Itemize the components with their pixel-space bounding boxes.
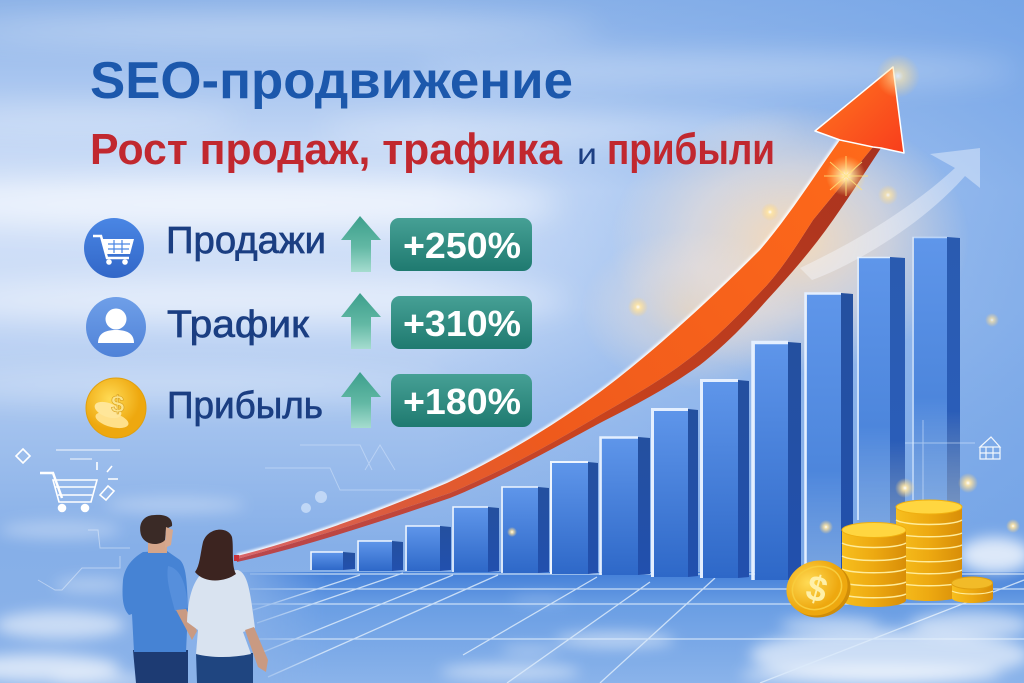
row: profit: [86, 372, 532, 438]
bar 3: [406, 526, 451, 571]
man face: [165, 527, 173, 548]
row: sales: [84, 216, 532, 278]
pale background arrow: [800, 148, 980, 280]
badge: +180%: [403, 381, 521, 422]
up arrow: [341, 216, 381, 272]
icon: user: [86, 297, 146, 357]
arrow front face: [237, 140, 873, 559]
bar 10: [753, 342, 801, 580]
bar 11: [806, 293, 853, 590]
man: [123, 515, 197, 683]
bar 7: [600, 437, 650, 575]
heading line 1: SEO-продвижение: [90, 52, 573, 110]
bar 13: [913, 237, 960, 505]
icon: cart outline in sky: [16, 449, 130, 590]
badge: +310%: [403, 303, 521, 344]
right coin stack: [896, 500, 962, 601]
row: traffic: [86, 293, 532, 357]
man arm: [176, 609, 197, 640]
icon: coins: $: [111, 391, 125, 418]
heading line 2: Рост продаж, трафика: [90, 125, 563, 174]
man hair: [140, 515, 172, 544]
label: Трафик: [167, 304, 309, 346]
clouds right of the chart: [780, 537, 1024, 639]
man sleeve: [167, 566, 188, 611]
bar 5: [502, 487, 549, 573]
bar 12: [858, 257, 905, 540]
badge: [391, 296, 532, 349]
badge: [390, 218, 532, 271]
label: Продажи: [166, 220, 326, 262]
arrow start cap: [234, 555, 239, 561]
large dollar coin: $: [802, 566, 832, 611]
bar 6: [551, 462, 598, 574]
up arrow: [341, 293, 381, 349]
man neck: [148, 540, 167, 553]
man trousers: [133, 650, 188, 683]
bar 9: [702, 380, 749, 578]
arrow sparkle: [824, 156, 868, 196]
up arrow: [341, 372, 381, 428]
sparkles: [265, 185, 1020, 541]
title: [90, 52, 775, 174]
label: Прибыль: [167, 385, 323, 427]
couple seen from behind: [123, 515, 268, 683]
woman hair: [195, 530, 236, 580]
floor grid: [230, 572, 1024, 683]
bar 1: [311, 552, 355, 570]
woman arm: [245, 627, 268, 672]
badge: +250%: [403, 225, 521, 266]
woman: [187, 530, 268, 683]
large dollar coin: [779, 552, 858, 626]
icon: shopping cart: [84, 218, 144, 278]
bar chart: [311, 237, 960, 590]
icon: coins: [86, 378, 146, 438]
left coin stack: [842, 522, 906, 607]
arrow white glow edge: [237, 140, 840, 556]
bar 2: [358, 541, 403, 571]
badge: [391, 374, 532, 427]
woman shirt: [187, 570, 255, 657]
heading line 2: прибыли: [607, 125, 775, 174]
bar 8: [652, 409, 698, 577]
heading line 2: и: [577, 138, 597, 171]
icon: store outline: [980, 437, 1000, 459]
man shirt: [123, 551, 188, 652]
arrow dark side: [237, 147, 881, 562]
bar 4: [453, 507, 499, 572]
coin stacks: [779, 500, 993, 626]
arrow head: [815, 67, 904, 153]
small coin stack: [952, 577, 993, 603]
main red-orange growth arrow: [234, 54, 920, 562]
woman trousers: [196, 653, 253, 683]
